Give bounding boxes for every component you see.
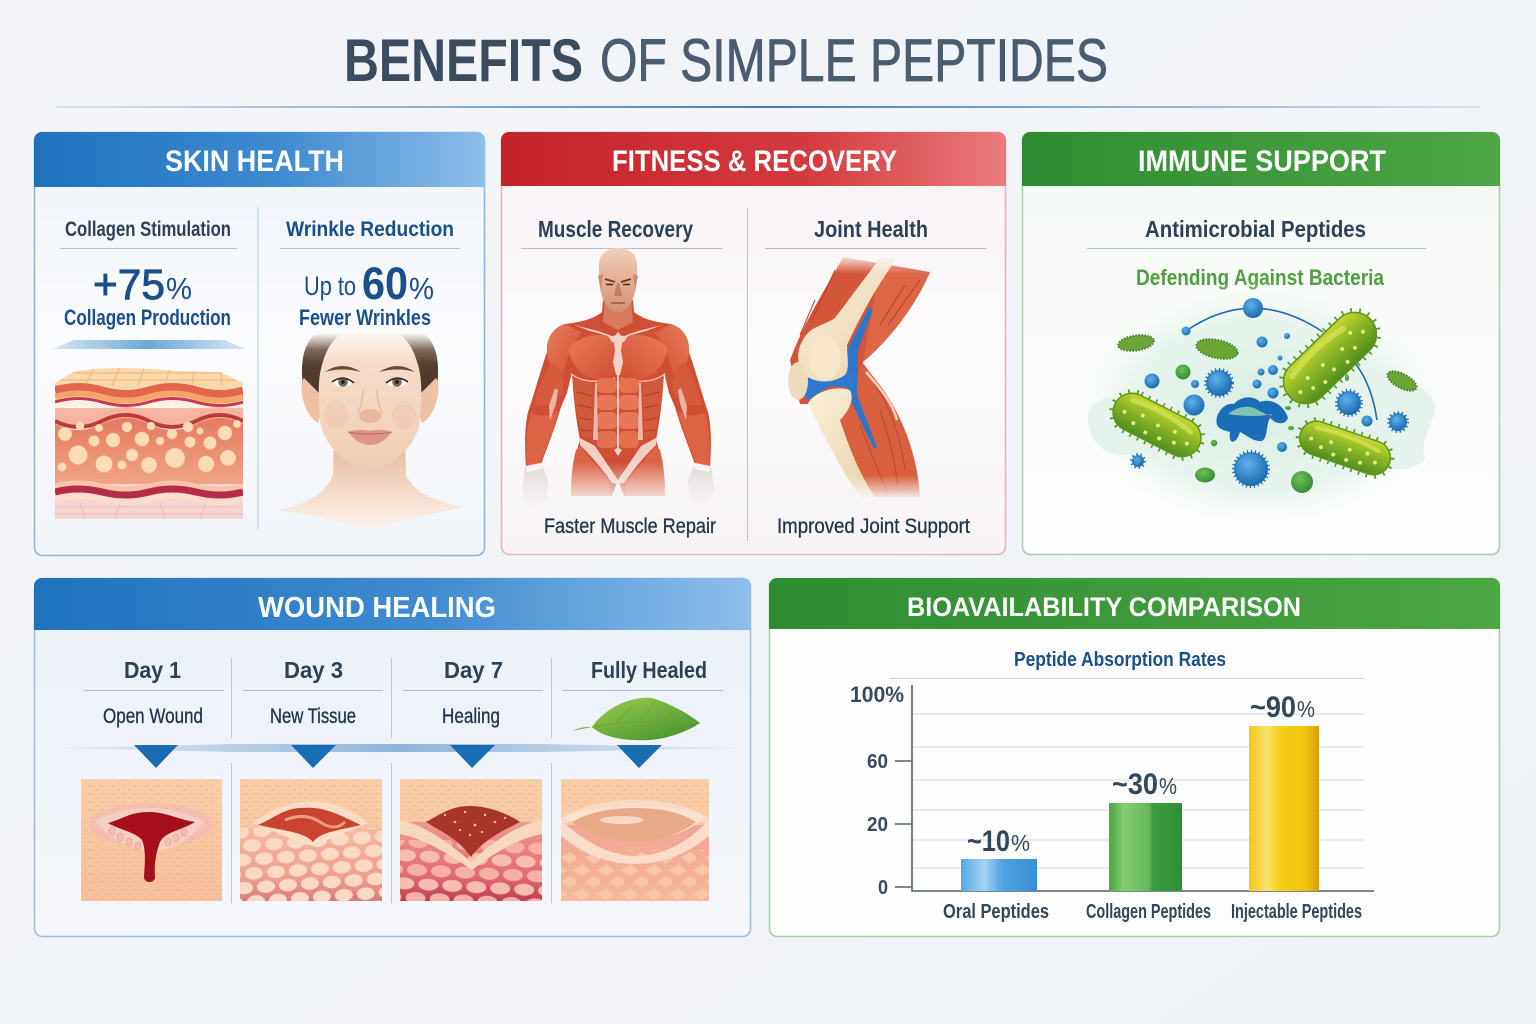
wound image: day 7 bbox=[400, 779, 542, 901]
bar: injectable peptides bbox=[1231, 691, 1362, 923]
panel: fitness & recovery bbox=[501, 132, 1006, 554]
small rod bacteria bbox=[1117, 333, 1419, 395]
joint health heading: Joint Health bbox=[814, 216, 928, 242]
y axis labels: 100% bbox=[850, 682, 904, 707]
large bacterium right bbox=[1295, 417, 1395, 479]
bioavailability header: BIOAVAILABILITY COMPARISON bbox=[907, 592, 1301, 622]
subheading: defending against bacteria: Defending Against Bacteria bbox=[1136, 265, 1385, 290]
bar: oral peptides: % bbox=[1011, 830, 1030, 856]
y axis labels: 60 bbox=[867, 751, 888, 773]
muscle recovery heading: Muscle Recovery bbox=[538, 216, 693, 242]
bar: oral peptides: ~10 bbox=[967, 825, 1010, 858]
stage: day 7 label: Day 7 bbox=[444, 657, 503, 683]
bar: collagen peptides: % bbox=[1159, 773, 1177, 799]
antimicrobial peptides heading: Antimicrobial Peptides bbox=[1145, 216, 1366, 242]
wound healing header bbox=[34, 578, 751, 630]
stage: day 7 label: Healing bbox=[442, 705, 500, 728]
illustration: bacteria and peptides bbox=[1075, 280, 1445, 530]
stage: fully healed label: Fully Healed bbox=[591, 657, 707, 683]
timeline band bbox=[50, 744, 745, 752]
y axis labels: 0 bbox=[878, 877, 888, 899]
stage: day 3 label: New Tissue bbox=[270, 705, 356, 728]
stat: up to 60% fewer wrinkles bbox=[299, 258, 434, 330]
stage: day 1 label: Open Wound bbox=[103, 705, 203, 728]
fitness header bbox=[501, 132, 1006, 186]
y axis labels: 20 bbox=[867, 814, 888, 836]
bar: collagen peptides: ~30 bbox=[1112, 768, 1158, 801]
skin health header bbox=[34, 132, 485, 187]
title: OF SIMPLE PEPTIDES bbox=[600, 27, 1108, 94]
stat: up to 60% fewer wrinkles: 60 bbox=[362, 258, 408, 309]
wound image: healed bbox=[561, 779, 709, 901]
panel: wound healing bbox=[34, 578, 751, 936]
bioavailability header bbox=[769, 578, 1500, 629]
wound image: day 3 bbox=[240, 779, 382, 901]
immune header bbox=[1022, 132, 1500, 186]
stage: day 3 label: Day 3 bbox=[284, 657, 343, 683]
wrinkle reduction column heading: Wrinkle Reduction bbox=[286, 218, 454, 241]
wound image: day 1 bbox=[81, 779, 222, 901]
bar: injectable peptides: Injectable Peptides bbox=[1231, 901, 1362, 923]
large bacterium upper right bbox=[1274, 303, 1386, 413]
bar: injectable peptides: % bbox=[1297, 696, 1315, 722]
immune header: IMMUNE SUPPORT bbox=[1138, 145, 1386, 178]
stat: up to 60% fewer wrinkles: Up to bbox=[304, 271, 356, 301]
illustration: woman's face bbox=[278, 333, 462, 530]
bar chart bbox=[850, 682, 1374, 923]
bar: collagen peptides bbox=[1086, 768, 1211, 923]
title bbox=[344, 27, 1108, 94]
stat: collagen production +75%: Collagen Production bbox=[64, 305, 231, 330]
stat: up to 60% fewer wrinkles: Fewer Wrinkles bbox=[299, 305, 431, 330]
bar: collagen peptides: Collagen Peptides bbox=[1086, 901, 1211, 923]
caption: faster muscle repair: Faster Muscle Repair bbox=[544, 515, 716, 538]
stage: day 1 label: Day 1 bbox=[124, 657, 181, 683]
caption: improved joint support: Improved Joint Support bbox=[777, 515, 970, 538]
chart subtitle: Peptide Absorption Rates bbox=[1014, 649, 1226, 671]
panel: immune support bbox=[1022, 132, 1500, 554]
illustration: muscular torso bbox=[522, 248, 714, 506]
timeline arrows bbox=[134, 745, 662, 768]
large bacterium left bbox=[1106, 387, 1208, 463]
stage: day 1 label bbox=[84, 657, 224, 728]
stage: day 3 label bbox=[243, 657, 383, 728]
skin cross-section illustration bbox=[55, 365, 243, 520]
icon: green leaf bbox=[572, 698, 700, 740]
bar: oral peptides: Oral Peptides bbox=[943, 901, 1049, 923]
skin health header: SKIN HEALTH bbox=[165, 145, 344, 178]
wound healing header: WOUND HEALING bbox=[258, 592, 496, 624]
stat: collagen production +75% bbox=[64, 261, 231, 330]
green cocci bbox=[1176, 364, 1349, 493]
panel: skin health bbox=[34, 132, 485, 556]
panel: bioavailability comparison bbox=[769, 578, 1500, 936]
collagen stimulation column heading: Collagen Stimulation bbox=[65, 218, 231, 241]
stat: collagen production +75%: +75 bbox=[93, 261, 165, 309]
stat: collagen production +75%: % bbox=[166, 271, 192, 306]
smooth blue peptides bbox=[1144, 298, 1372, 452]
fitness header: FITNESS & RECOVERY bbox=[612, 145, 897, 178]
bar: oral peptides bbox=[943, 825, 1049, 923]
illustration: knee joint bbox=[788, 257, 930, 497]
icon: blue platform above skin bbox=[52, 340, 246, 349]
central peptide blob bbox=[1216, 397, 1288, 442]
bar: injectable peptides: ~90 bbox=[1250, 691, 1296, 724]
stat: up to 60% fewer wrinkles: % bbox=[409, 271, 434, 306]
y axis labels bbox=[850, 682, 904, 899]
title: BENEFITS bbox=[344, 27, 583, 94]
stage: day 7 label bbox=[403, 657, 543, 728]
blue spiky cocci bbox=[1132, 370, 1407, 486]
